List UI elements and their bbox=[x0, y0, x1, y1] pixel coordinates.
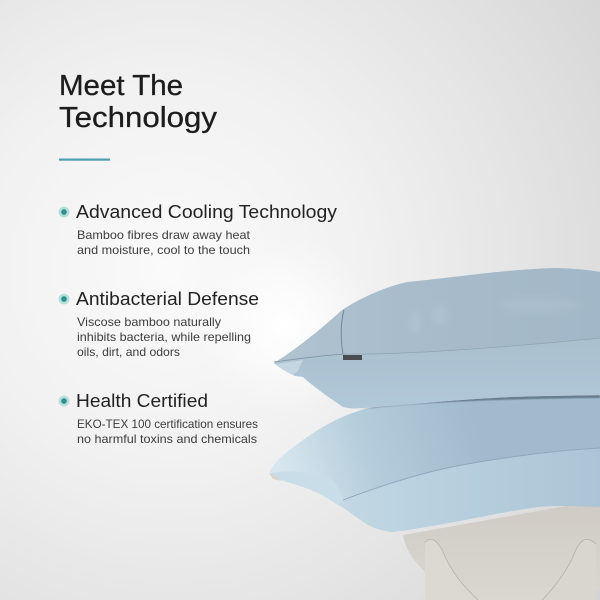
feature: antibacterial defense bbox=[59, 289, 259, 359]
feature: health certified bbox=[59, 391, 258, 446]
description: antibacterial defense bbox=[77, 315, 251, 359]
lower pillow opening bbox=[270, 471, 343, 505]
description: health certified: EKO-TEX 100 certification ensures bbox=[77, 417, 258, 431]
icon: bullet bbox=[59, 294, 69, 304]
stool bbox=[403, 500, 600, 600]
fabric highlights bbox=[411, 297, 580, 334]
heading: advanced cooling: Advanced Cooling Technology bbox=[76, 202, 337, 222]
icon: bullet bbox=[59, 207, 69, 217]
heading: health certified: Health Certified bbox=[76, 391, 208, 411]
icon: bullet bbox=[59, 396, 69, 406]
lower pillow bbox=[269, 396, 600, 532]
sewn-in label bbox=[343, 355, 362, 360]
description: health certified: no harmful toxins and chemicals bbox=[77, 432, 257, 446]
pillow stack on stool bbox=[269, 268, 600, 600]
heading: antibacterial defense: Antibacterial Defense bbox=[76, 289, 259, 309]
upper pillow flap bbox=[274, 338, 600, 408]
description: antibacterial defense: Viscose bamboo naturally bbox=[77, 315, 221, 329]
description: antibacterial defense: inhibits bacteria, while repelling bbox=[77, 330, 251, 344]
description: advanced cooling: Bamboo fibres draw away heat bbox=[77, 228, 251, 242]
upper pillow hem bbox=[274, 354, 345, 362]
description: advanced cooling bbox=[77, 228, 251, 257]
title: Technology bbox=[59, 102, 218, 134]
shadow between pillows bbox=[356, 394, 600, 410]
title bbox=[59, 70, 218, 134]
feature: advanced cooling bbox=[59, 202, 337, 257]
upper pillow bbox=[274, 268, 600, 408]
accent rule bbox=[59, 158, 110, 161]
description: advanced cooling: and moisture, cool to the touch bbox=[77, 243, 250, 257]
title: Meet The bbox=[59, 70, 183, 102]
lower pillow flap bbox=[343, 448, 600, 532]
description: health certified bbox=[77, 417, 258, 446]
description: antibacterial defense: oils, dirt, and odors bbox=[77, 345, 180, 359]
